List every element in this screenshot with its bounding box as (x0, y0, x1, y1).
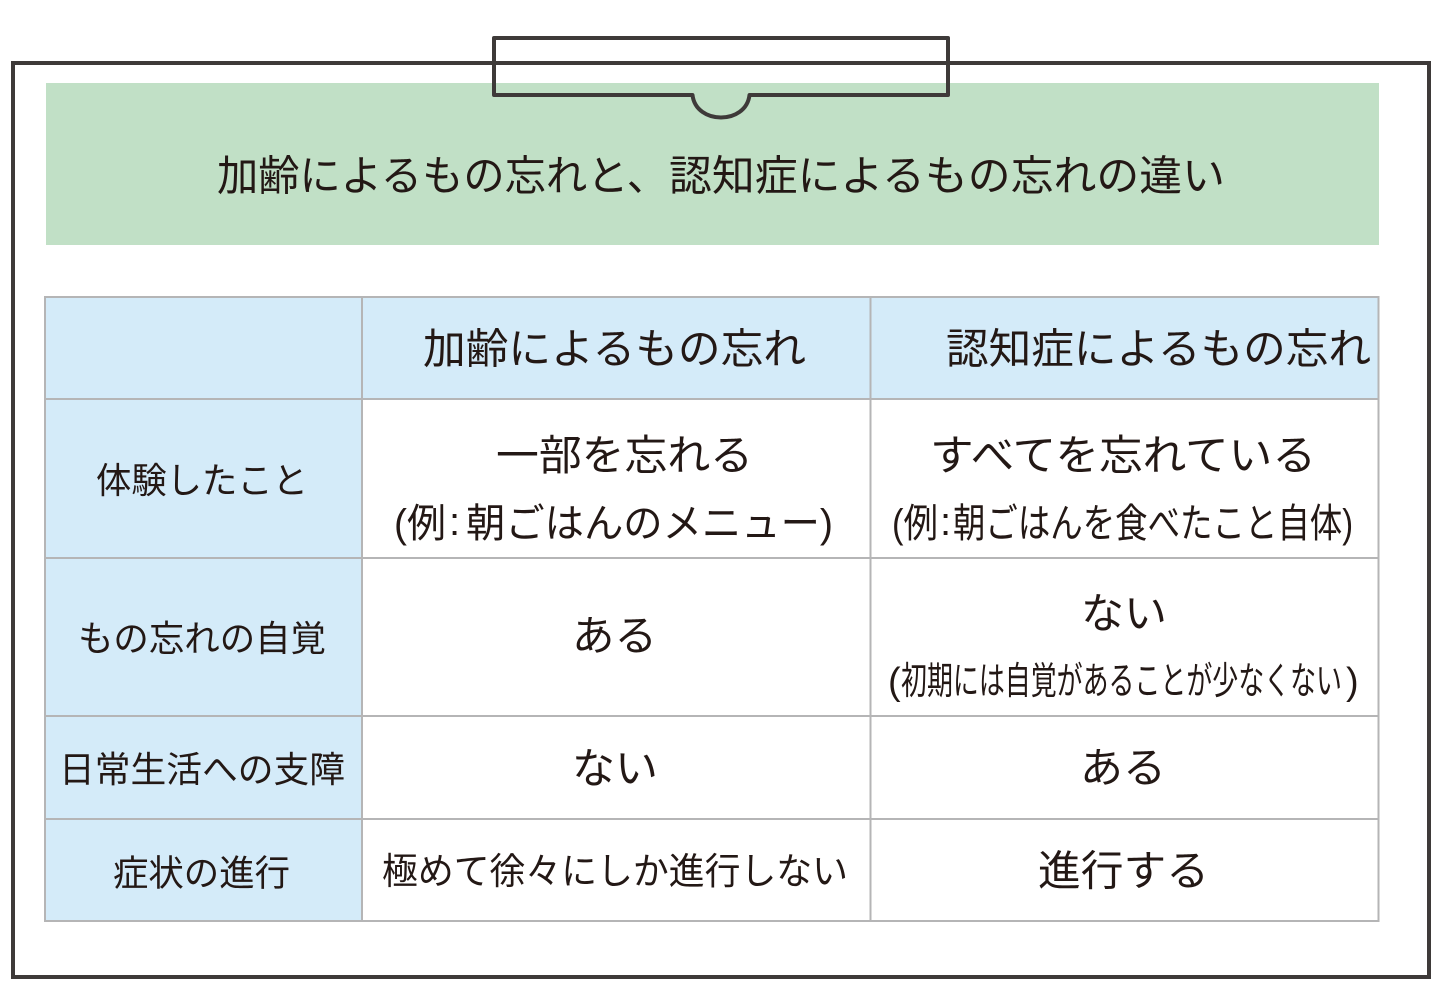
row label: awareness: もの忘れの自覚 (78, 618, 326, 659)
row label: progression: 症状の進行 (113, 852, 290, 894)
cell: example menu: : (449, 500, 460, 544)
comparison table (45, 297, 1378, 921)
cell: aware note: ( (888, 661, 901, 703)
cell: aware note: ) (1346, 661, 1359, 703)
cell: example eating: 朝ごはんを食べたこと自体) (953, 502, 1353, 546)
title: 加齢によるもの忘れと、 (217, 152, 668, 200)
column heading: age-related forgetfulness: 加齢によるもの忘れ (423, 326, 806, 372)
cell: daily yes: ある (1080, 744, 1166, 792)
row label: daily life: 日常生活への支障 (59, 749, 345, 790)
header row background (45, 297, 1378, 399)
title (217, 152, 1225, 200)
row label column background (45, 399, 362, 921)
row label: experience: 体験したこと (96, 460, 308, 501)
cell: daily no: ない (572, 745, 658, 792)
cell: slow progression: 極めて徐々にしか進行しない (382, 851, 848, 892)
cell: forgets everything: すべてを忘れている (930, 432, 1316, 479)
cell: forgets a part: 一部を忘れる (496, 432, 753, 479)
cell: aware no: ない (1081, 590, 1167, 637)
cell: aware yes: ある (572, 612, 657, 660)
cell: example eating: (例 (892, 502, 938, 546)
title: 認知症によるもの忘れの違い (669, 152, 1225, 200)
title banner (46, 83, 1379, 245)
cell: example eating: : (940, 500, 951, 544)
column heading: dementia forgetfulness: 認知症によるもの忘れ (946, 326, 1371, 372)
cell: progresses: 進行する (1038, 848, 1209, 894)
cell: example menu: (例 (394, 502, 446, 546)
icon: clipboard clip (494, 38, 948, 118)
table grid (45, 297, 1378, 921)
cell: example menu: 朝ごはんのメニュー) (466, 502, 833, 546)
